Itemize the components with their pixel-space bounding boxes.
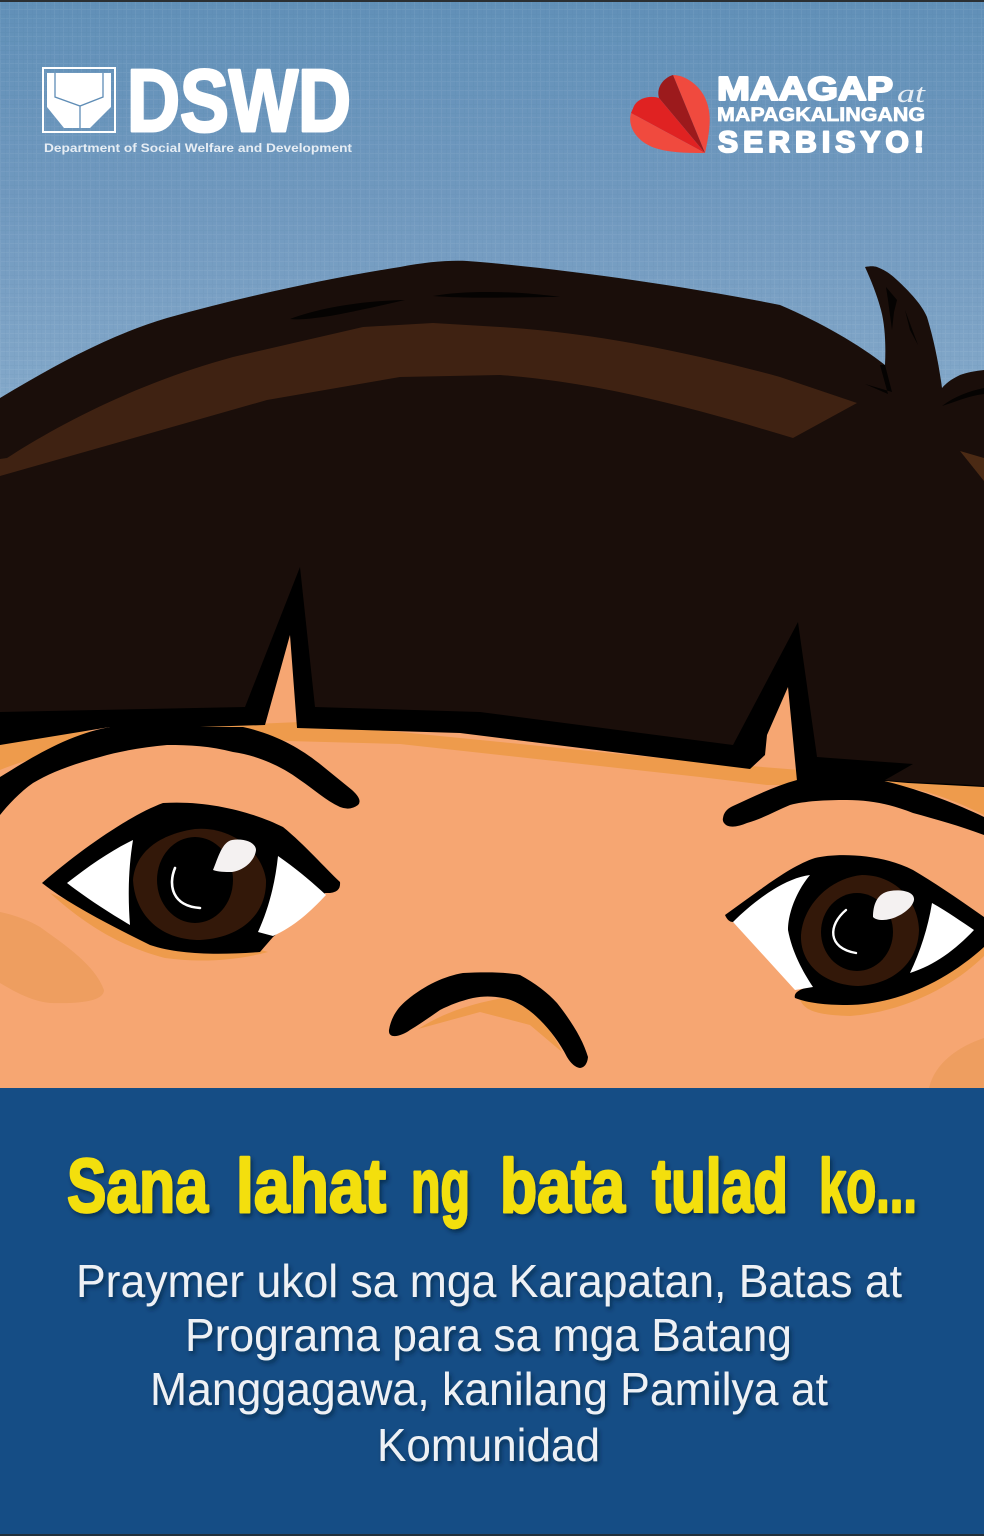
fringe shadow	[0, 722, 984, 815]
pupil	[821, 893, 893, 971]
background sky	[0, 0, 984, 520]
subtitle	[76, 1255, 902, 1471]
yellow title: lahat	[236, 1144, 386, 1229]
eye outline	[42, 803, 340, 954]
right eyebrow	[723, 780, 984, 835]
eye lower shadow	[800, 940, 984, 1016]
hair highlight	[0, 323, 857, 476]
pupil reflection	[833, 910, 856, 953]
yellow title: ko...	[819, 1144, 917, 1229]
Maagap at Mapagkalingang Serbisyo logo	[630, 70, 926, 159]
yellow title: Sana	[67, 1144, 209, 1229]
iris	[801, 875, 919, 986]
left eyebrow	[0, 727, 360, 815]
department name: Department of Social Welfare and Development	[44, 141, 352, 155]
hair highlight right	[960, 451, 984, 481]
iris	[133, 829, 266, 940]
eye white right	[910, 903, 974, 973]
slogan line 1: MAAGAP	[717, 70, 893, 107]
slogan line 3: SERBISYO!	[718, 126, 924, 159]
child face illustration	[0, 261, 984, 1088]
yellow title: tulad	[652, 1144, 788, 1229]
frown mouth	[389, 972, 588, 1068]
eye lower shadow	[50, 893, 268, 960]
DSWD logo	[43, 51, 352, 155]
subtitle: Manggagawa, kanilang Pamilya at	[150, 1363, 828, 1415]
hair strands	[290, 287, 984, 406]
face skin	[0, 400, 984, 1088]
slogan line 2: MAPAGKALINGANG	[717, 105, 925, 126]
pupil	[157, 837, 233, 923]
slogan at: at	[897, 79, 926, 108]
eye glint	[213, 840, 256, 872]
fringe outline	[0, 500, 984, 787]
DSWD emblem	[43, 68, 115, 132]
DSWD wordmark: DSWD	[127, 51, 351, 150]
subtitle: Programa para sa mga Batang	[185, 1309, 792, 1361]
right cheek blush	[929, 1038, 984, 1088]
bottom title panel	[0, 1088, 984, 1536]
subtitle: Praymer ukol sa mga Karapatan, Batas at	[76, 1255, 902, 1307]
frown shadow	[418, 998, 562, 1052]
eye white left	[67, 840, 133, 925]
left cheek blush	[0, 912, 104, 1003]
left eye	[42, 803, 340, 960]
eye white left	[733, 875, 813, 990]
yellow title: ng	[411, 1144, 470, 1229]
eye outline	[725, 855, 984, 1005]
yellow title: bata	[500, 1144, 626, 1229]
hair	[0, 261, 984, 786]
eye white right	[258, 856, 326, 936]
subtitle: Komunidad	[377, 1419, 600, 1471]
eye glint	[873, 890, 914, 920]
pupil reflection	[172, 868, 200, 908]
right eye	[725, 855, 984, 1016]
heart icon	[630, 75, 710, 153]
